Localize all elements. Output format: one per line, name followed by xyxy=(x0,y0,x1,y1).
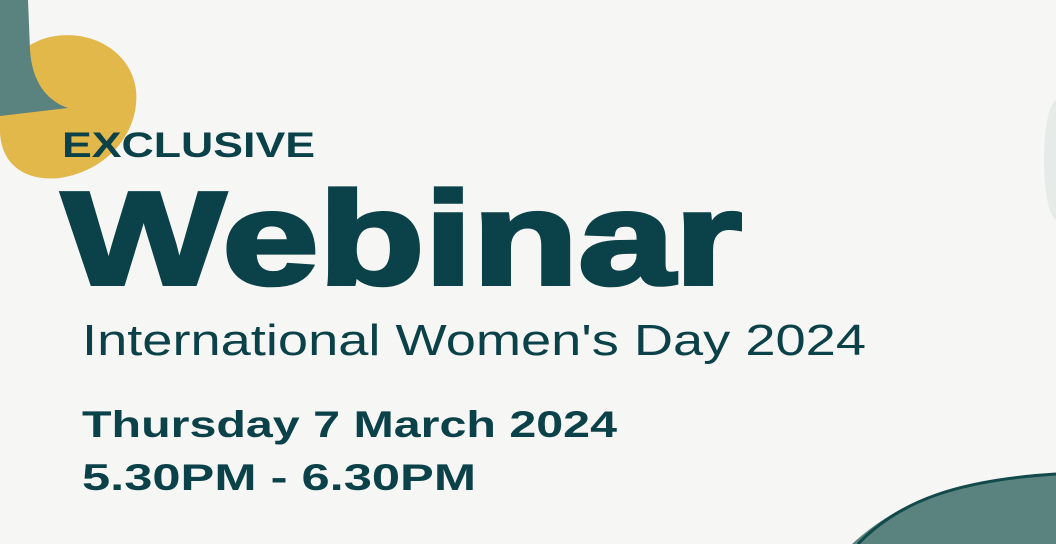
date: Thursday 7 March 2024 xyxy=(82,404,618,445)
decorative faded circle right edge xyxy=(1044,100,1056,220)
title: Webinar: Webinar xyxy=(62,165,742,312)
decorative yellow blob xyxy=(0,35,136,178)
subtitle: International Women's Day 2024 xyxy=(82,316,866,365)
decorative teal shape top-left xyxy=(0,0,68,116)
heading: EXCLUSIVE: EXCLUSIVE xyxy=(62,126,315,165)
decorative teal circle bottom-right xyxy=(852,474,1056,544)
time: 5.30PM - 6.30PM xyxy=(82,457,476,498)
